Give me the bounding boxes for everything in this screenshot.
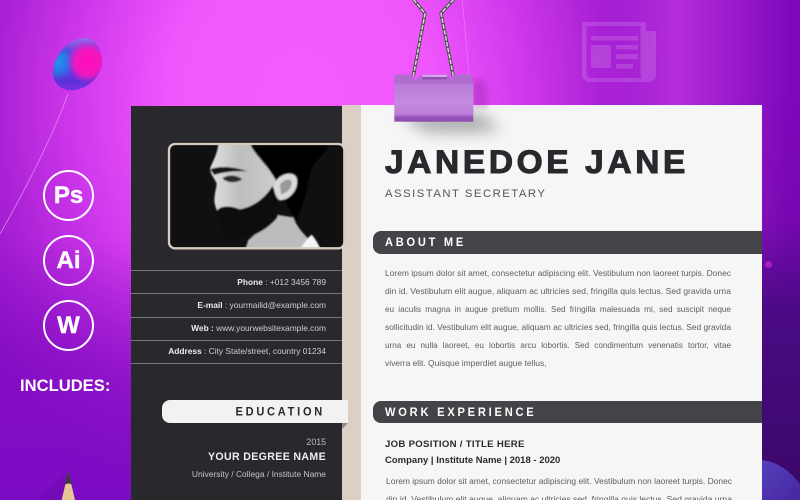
icon: Illustrator badge	[43, 235, 94, 286]
heading: work experience	[373, 400, 762, 423]
institute: University / Collega / Institute Name	[192, 468, 326, 478]
heading: about me: ABOUT ME	[385, 235, 466, 249]
eye	[222, 175, 242, 182]
contact: email: E-mail : yourmailid@example.com	[197, 300, 326, 310]
icon: Illustrator badge: Ai	[56, 247, 80, 274]
contact list	[168, 277, 326, 356]
text: about me paragraph: din id. Vestibulum elit augue, aliquam ac ultricies sed, fringilla quis lectus. Sed gravida urna	[385, 286, 731, 296]
light thread	[462, 0, 469, 75]
neck	[245, 214, 309, 248]
face	[209, 145, 278, 212]
shirt	[300, 234, 321, 248]
photo: portrait	[168, 142, 344, 250]
contact: web: Web : www.yourwebsitexample.com	[191, 323, 326, 333]
heading: education: EDUCATION	[236, 404, 325, 418]
company: Company | Institute Name | 2018 - 2020	[385, 455, 560, 466]
text: about me paragraph: Lorem ipsum dolor sit amet, consectetur adipiscing elit. Vestibulum non laoreet turpis. Donec	[385, 268, 732, 278]
panel: beige strip	[342, 105, 361, 500]
text: work paragraph: Lorem ipsum dolor sit amet, consectetur adipiscing elit. Vestibulum non laoreet turpis. Donec	[386, 476, 732, 486]
icon: pencil	[40, 472, 75, 500]
contact: address: Address : City State/street, country 01234	[168, 346, 326, 356]
text: about me paragraph	[385, 268, 732, 368]
binder clip	[394, 0, 502, 142]
wires	[413, 0, 454, 76]
shadows	[472, 80, 488, 107]
education year: 2015	[306, 437, 326, 447]
hair	[248, 143, 328, 222]
eyebrow	[210, 167, 248, 175]
icon: Word badge: W	[57, 312, 80, 339]
panel: white resume page	[361, 105, 762, 500]
beard	[217, 186, 279, 241]
job title: JOB POSITION / TITLE HERE	[385, 439, 525, 450]
text: about me paragraph: sollicitudin id. Vestibulum elit augue, aliquam ac ultricies sed, fringilla quis lectus. Sed gravida	[385, 322, 731, 332]
icon: Photoshop badge: Ps	[54, 182, 83, 209]
icon: decorative dot	[765, 261, 772, 268]
education fold	[342, 423, 348, 429]
icon: Photoshop badge	[43, 170, 94, 221]
education details	[192, 437, 326, 478]
icon: balloon with string	[0, 38, 102, 234]
heading: about me	[373, 231, 762, 254]
subtitle: ASSISTANT SECRETARY	[385, 188, 546, 200]
heading: education	[162, 400, 348, 423]
icon: newspaper watermark	[582, 22, 656, 82]
ear	[274, 174, 297, 201]
heading: work experience: WORK EXPERIENCE	[385, 404, 536, 418]
text: about me paragraph: viverra elit. Quisque imperdiet augue tellus,	[385, 358, 546, 368]
icon: Word badge	[43, 300, 94, 351]
decorative corner blob	[762, 460, 800, 500]
panel: dark sidebar	[131, 106, 342, 500]
heading: includes: INCLUDES:	[20, 376, 110, 395]
degree name: YOUR DEGREE NAME	[208, 450, 326, 462]
text: work paragraph	[386, 476, 732, 500]
body	[394, 75, 473, 84]
contact: phone: Phone : +012 3456 789	[237, 277, 326, 287]
